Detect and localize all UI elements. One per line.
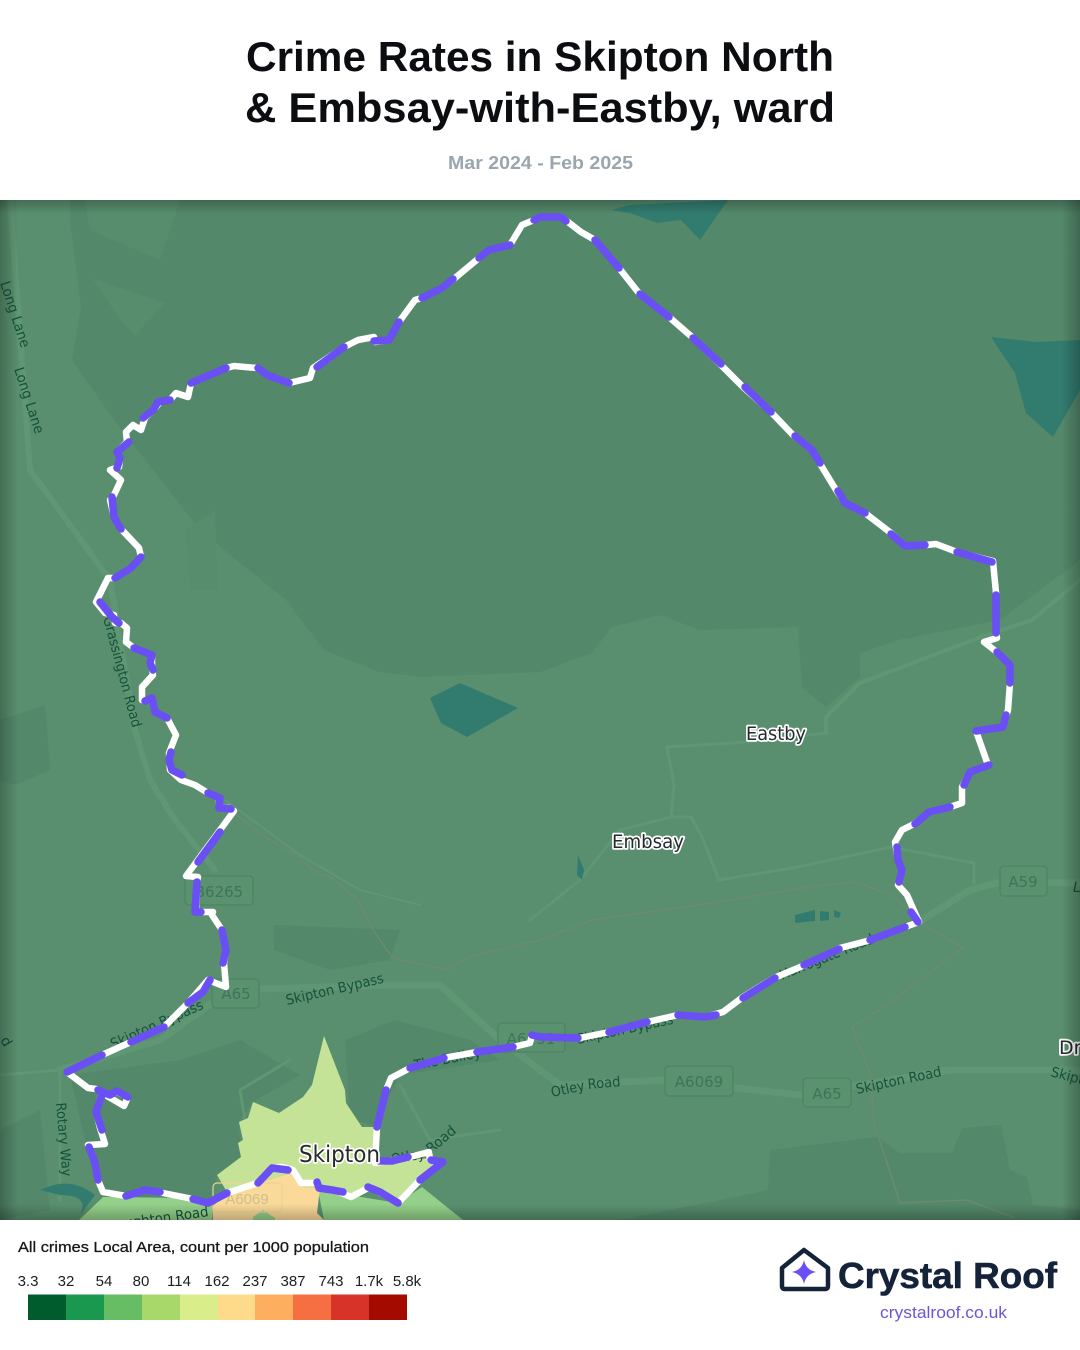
ward boundary line: [67, 217, 1010, 1203]
boundary: white casing: [67, 217, 1010, 1203]
road labels: Harrogate Road: [778, 931, 876, 984]
logo: Crystal Roof: [782, 1250, 1058, 1322]
road labels: Skipton Bypass: [576, 1012, 675, 1048]
legend tick labels: 54: [96, 1273, 112, 1290]
choropleth: Skipton peach area: [212, 1173, 324, 1220]
town label: Skipton: Skipton: [299, 1142, 380, 1168]
legend tick labels: 162: [204, 1273, 230, 1290]
road shield: A65 east: A65: [812, 1085, 842, 1103]
road labels: Road: [423, 1123, 460, 1157]
map terrain: lighter fields: [85, 200, 218, 590]
road shield: A6069 in town: A6069: [225, 1191, 269, 1208]
road labels: Skipton Bypass: [108, 997, 206, 1053]
legend tick labels: 237: [242, 1273, 268, 1290]
legend tick labels: 114: [167, 1273, 191, 1290]
legend tick labels: 5.8k: [393, 1273, 422, 1290]
choropleth: Skipton light yellow-green area: [217, 1036, 443, 1203]
panel: choropleth map: [0, 200, 1080, 1235]
road shield: A6069 east: A6069: [675, 1073, 723, 1091]
legend: [18, 1239, 422, 1320]
legend tick labels: 1.7k: [355, 1273, 384, 1290]
map boundary: parish line: [234, 813, 1015, 1218]
legend tick labels: 743: [318, 1273, 344, 1290]
road labels: Grassington Road: [99, 615, 144, 729]
legend tick labels: 80: [133, 1273, 149, 1290]
road shield: A65 west: A65: [221, 985, 251, 1003]
legend tick labels: 387: [280, 1273, 306, 1290]
road labels: Otley: [550, 1078, 586, 1101]
choropleth: Skipton low-rate green area: [79, 1187, 463, 1220]
logo wordmark: Crystal Roof: [838, 1255, 1058, 1296]
map terrain: darker moorland: [0, 200, 1080, 1220]
legend tick labels: 3.3: [18, 1273, 38, 1290]
road labels: Rotary Way: [52, 1102, 74, 1177]
road shield: B6265: [185, 876, 253, 905]
road labels: Long Lane: [10, 365, 47, 436]
road labels: Road: [587, 1074, 621, 1093]
road labels: [0, 279, 1080, 1235]
icon: house outline: [782, 1250, 828, 1289]
road labels: Otley: [390, 1146, 426, 1168]
legend tick labels: 32: [58, 1273, 74, 1290]
road shield: A59: [1000, 866, 1047, 896]
road shield: A6131: [498, 1023, 565, 1052]
road labels: Skipton Bypass: [284, 971, 385, 1009]
road shield: A65 east: [803, 1078, 851, 1107]
road shield: A65 west: [212, 979, 259, 1008]
road shield: B6265: B6265: [195, 883, 243, 901]
title: & Embsay-with-Eastby, ward: [245, 84, 835, 131]
title: [245, 33, 835, 131]
subtitle: date range: Mar 2024 - Feb 2025: [448, 153, 633, 173]
road shield: A6069 in town: [213, 1183, 282, 1212]
legend colour scale: [28, 1294, 407, 1320]
road shield: A6131: A6131: [507, 1030, 555, 1048]
boundary: purple dashes: [67, 217, 1010, 1203]
logo url: crystalroof.co.uk: [880, 1304, 1008, 1322]
legend tick labels: [18, 1273, 422, 1290]
town label: Embsay: Embsay: [612, 831, 684, 853]
town label: Eastby: Eastby: [746, 723, 806, 745]
map roads: [238, 1064, 284, 1116]
road shield: A6069 east: [665, 1066, 733, 1096]
road labels: The Bailey: [412, 1045, 483, 1074]
map edge vignette: [0, 200, 1080, 1220]
water bodies: [40, 200, 1080, 1215]
road labels: Broughton Road: [101, 1204, 210, 1235]
title: Crime Rates in Skipton North: [246, 33, 834, 80]
legend title: All crimes Local Area, count per 1000 population: [18, 1239, 369, 1256]
choropleth: small green pocket: [253, 1210, 275, 1220]
road labels: Skipton Road: [855, 1064, 943, 1098]
icon: four-point star: [792, 1260, 816, 1284]
road shield: A59: A59: [1008, 873, 1038, 891]
